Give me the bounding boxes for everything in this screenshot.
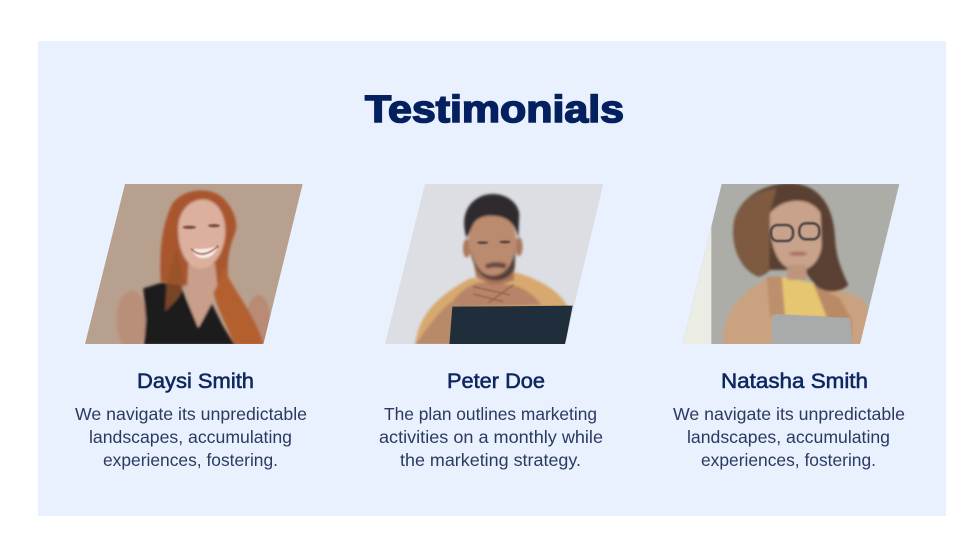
panel: Daysi Smith testimonial [75,180,310,470]
description: We navigate its unpredictable [673,404,905,424]
panel: background [38,41,946,516]
description: landscapes, accumulating [89,427,292,447]
description: experiences, fostering. [103,450,278,470]
name: Daysi Smith [137,370,254,393]
title: Testimonials [365,89,624,131]
description: landscapes, accumulating [687,427,890,447]
photo: Natasha Smith [680,180,910,347]
name: Natasha Smith [721,370,868,393]
description: The plan outlines marketing [384,404,597,424]
description: activities on a monthly while [379,427,603,447]
description [75,404,307,470]
panel: Peter Doe testimonial [379,180,610,470]
description: the marketing strategy. [400,450,581,470]
description: experiences, fostering. [701,450,876,470]
description: We navigate its unpredictable [75,404,307,424]
panel: Natasha Smith testimonial [673,180,910,470]
description [379,404,603,470]
photo: Daysi Smith [85,184,302,344]
description [673,404,905,470]
name: Peter Doe [447,370,545,393]
photo: Peter Doe [380,180,610,347]
